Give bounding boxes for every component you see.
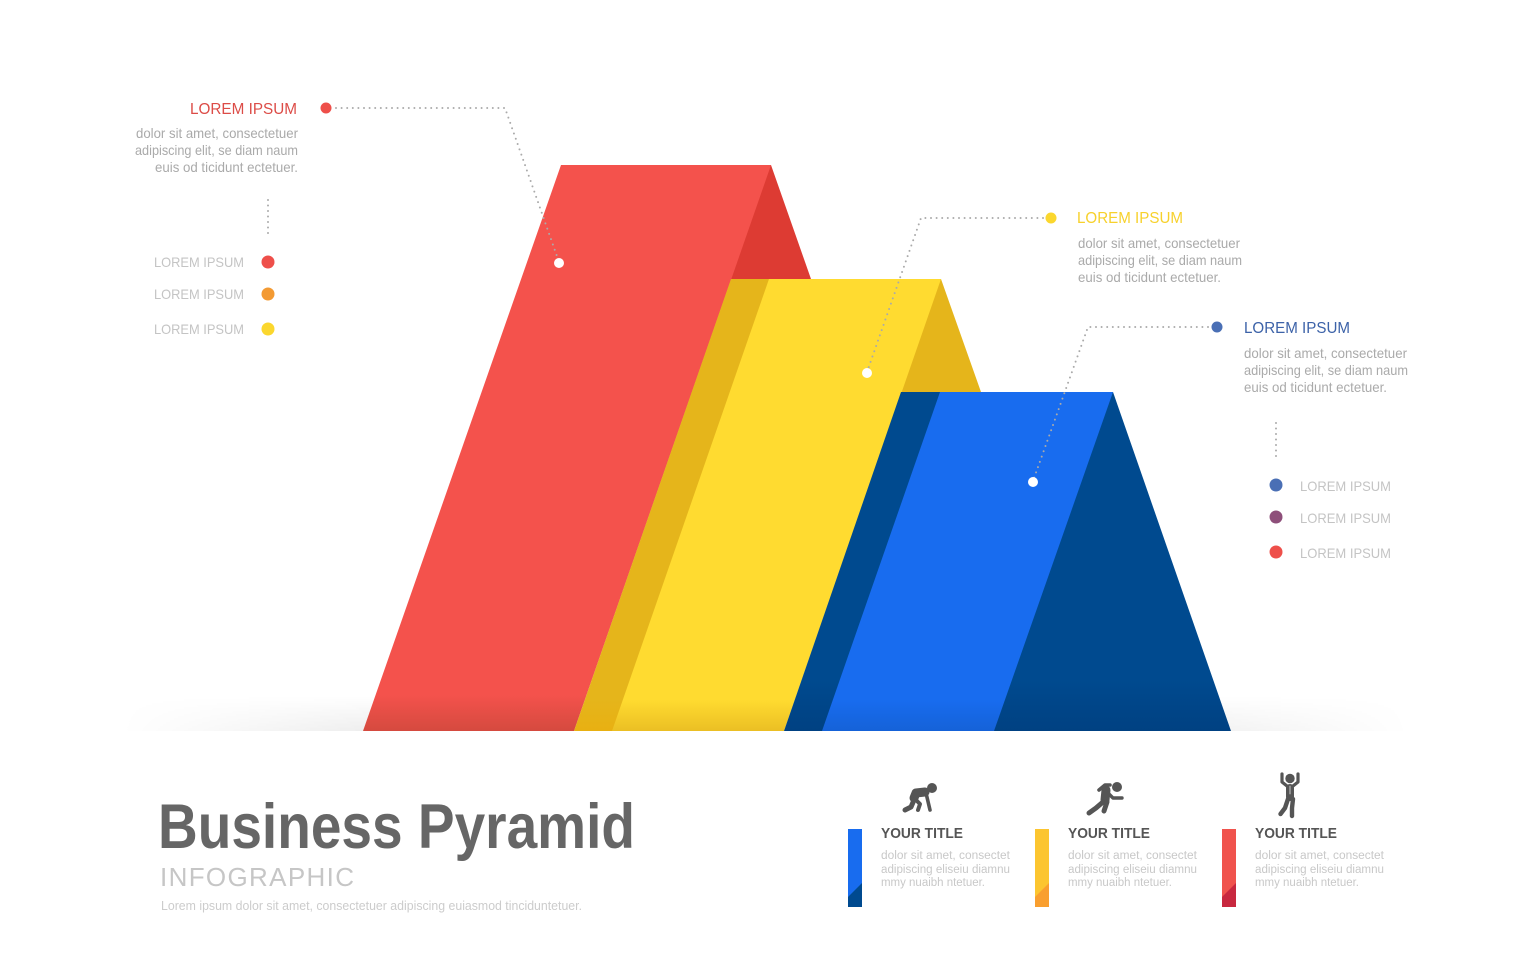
text: second step: mmy nuaibh ntetuer. xyxy=(1068,877,1172,889)
text: second step: dolor sit amet, consectet xyxy=(1068,850,1198,862)
legend: left: LOREM IPSUM xyxy=(154,286,244,302)
colour bar: blue xyxy=(848,829,862,907)
callout: blue connector line xyxy=(1028,322,1222,487)
text block: yellow callout xyxy=(1077,210,1242,285)
panel: third step xyxy=(1222,774,1385,907)
legend: right: LOREM IPSUM xyxy=(1300,545,1391,561)
text: second step xyxy=(1068,825,1198,889)
legend: left: LOREM IPSUM xyxy=(154,321,244,337)
icon: crouching runner xyxy=(905,783,937,810)
legend: right xyxy=(1270,423,1391,561)
text: third step: mmy nuaibh ntetuer. xyxy=(1255,877,1359,889)
pyramid: red layer xyxy=(363,165,811,731)
legend: left: LOREM IPSUM xyxy=(154,254,244,270)
text block: blue callout: euis od ticidunt ectetuer. xyxy=(1244,379,1387,395)
title block xyxy=(158,792,635,913)
legend: left xyxy=(154,200,274,337)
text: first step: YOUR TITLE xyxy=(881,825,963,842)
text: third step xyxy=(1255,825,1385,889)
colour bar: yellow xyxy=(1035,829,1049,907)
text block: yellow callout: adipiscing elit, se diam naum xyxy=(1078,252,1242,268)
text block: blue callout xyxy=(1244,320,1408,395)
panel: first step xyxy=(848,783,1011,907)
text block: red callout: euis od ticidunt ectetuer. xyxy=(155,159,298,175)
text block: blue callout: dolor sit amet, consectetuer xyxy=(1244,345,1407,361)
pyramid chart xyxy=(363,165,1231,731)
text: second step: YOUR TITLE xyxy=(1068,825,1150,842)
text: first step: dolor sit amet, consectet xyxy=(881,850,1011,862)
text block: blue callout: adipiscing elit, se diam naum xyxy=(1244,362,1408,378)
legend: right: LOREM IPSUM xyxy=(1300,510,1391,526)
legend: right: LOREM IPSUM xyxy=(1300,478,1391,494)
text block: red callout: dolor sit amet, consectetuer xyxy=(136,125,298,141)
text: first step xyxy=(881,825,1011,889)
panel: second step xyxy=(1035,782,1198,907)
callout: red connector line xyxy=(320,102,564,268)
text block: yellow callout: euis od ticidunt ectetuer. xyxy=(1078,269,1221,285)
text: third step: YOUR TITLE xyxy=(1255,825,1337,842)
pyramid: yellow layer xyxy=(574,279,981,731)
text: first step: adipiscing eliseiu diamnu xyxy=(881,864,1010,876)
heading: Business Pyramid xyxy=(158,792,635,862)
icon: celebrating person xyxy=(1280,774,1298,816)
subheading: INFOGRAPHIC xyxy=(160,862,354,892)
text block: red callout: LOREM IPSUM xyxy=(190,101,297,118)
text: second step: adipiscing eliseiu diamnu xyxy=(1068,864,1197,876)
pyramid: blue layer xyxy=(784,392,1231,731)
text: first step: mmy nuaibh ntetuer. xyxy=(881,877,985,889)
text block: red callout xyxy=(135,101,298,175)
text block: blue callout: LOREM IPSUM xyxy=(1244,320,1350,337)
icon: sprinter xyxy=(1089,782,1122,813)
colour bar: red xyxy=(1222,829,1236,907)
text block: yellow callout: dolor sit amet, consectetuer xyxy=(1078,235,1240,251)
description: Lorem ipsum dolor sit amet, consectetuer adipiscing euiasmod tinciduntetuer. xyxy=(161,898,582,913)
text: third step: dolor sit amet, consectet xyxy=(1255,850,1385,862)
text block: red callout: adipiscing elit, se diam naum xyxy=(135,142,298,158)
text block: yellow callout: LOREM IPSUM xyxy=(1077,210,1183,227)
callout: yellow connector line xyxy=(862,212,1056,378)
text: third step: adipiscing eliseiu diamnu xyxy=(1255,864,1384,876)
